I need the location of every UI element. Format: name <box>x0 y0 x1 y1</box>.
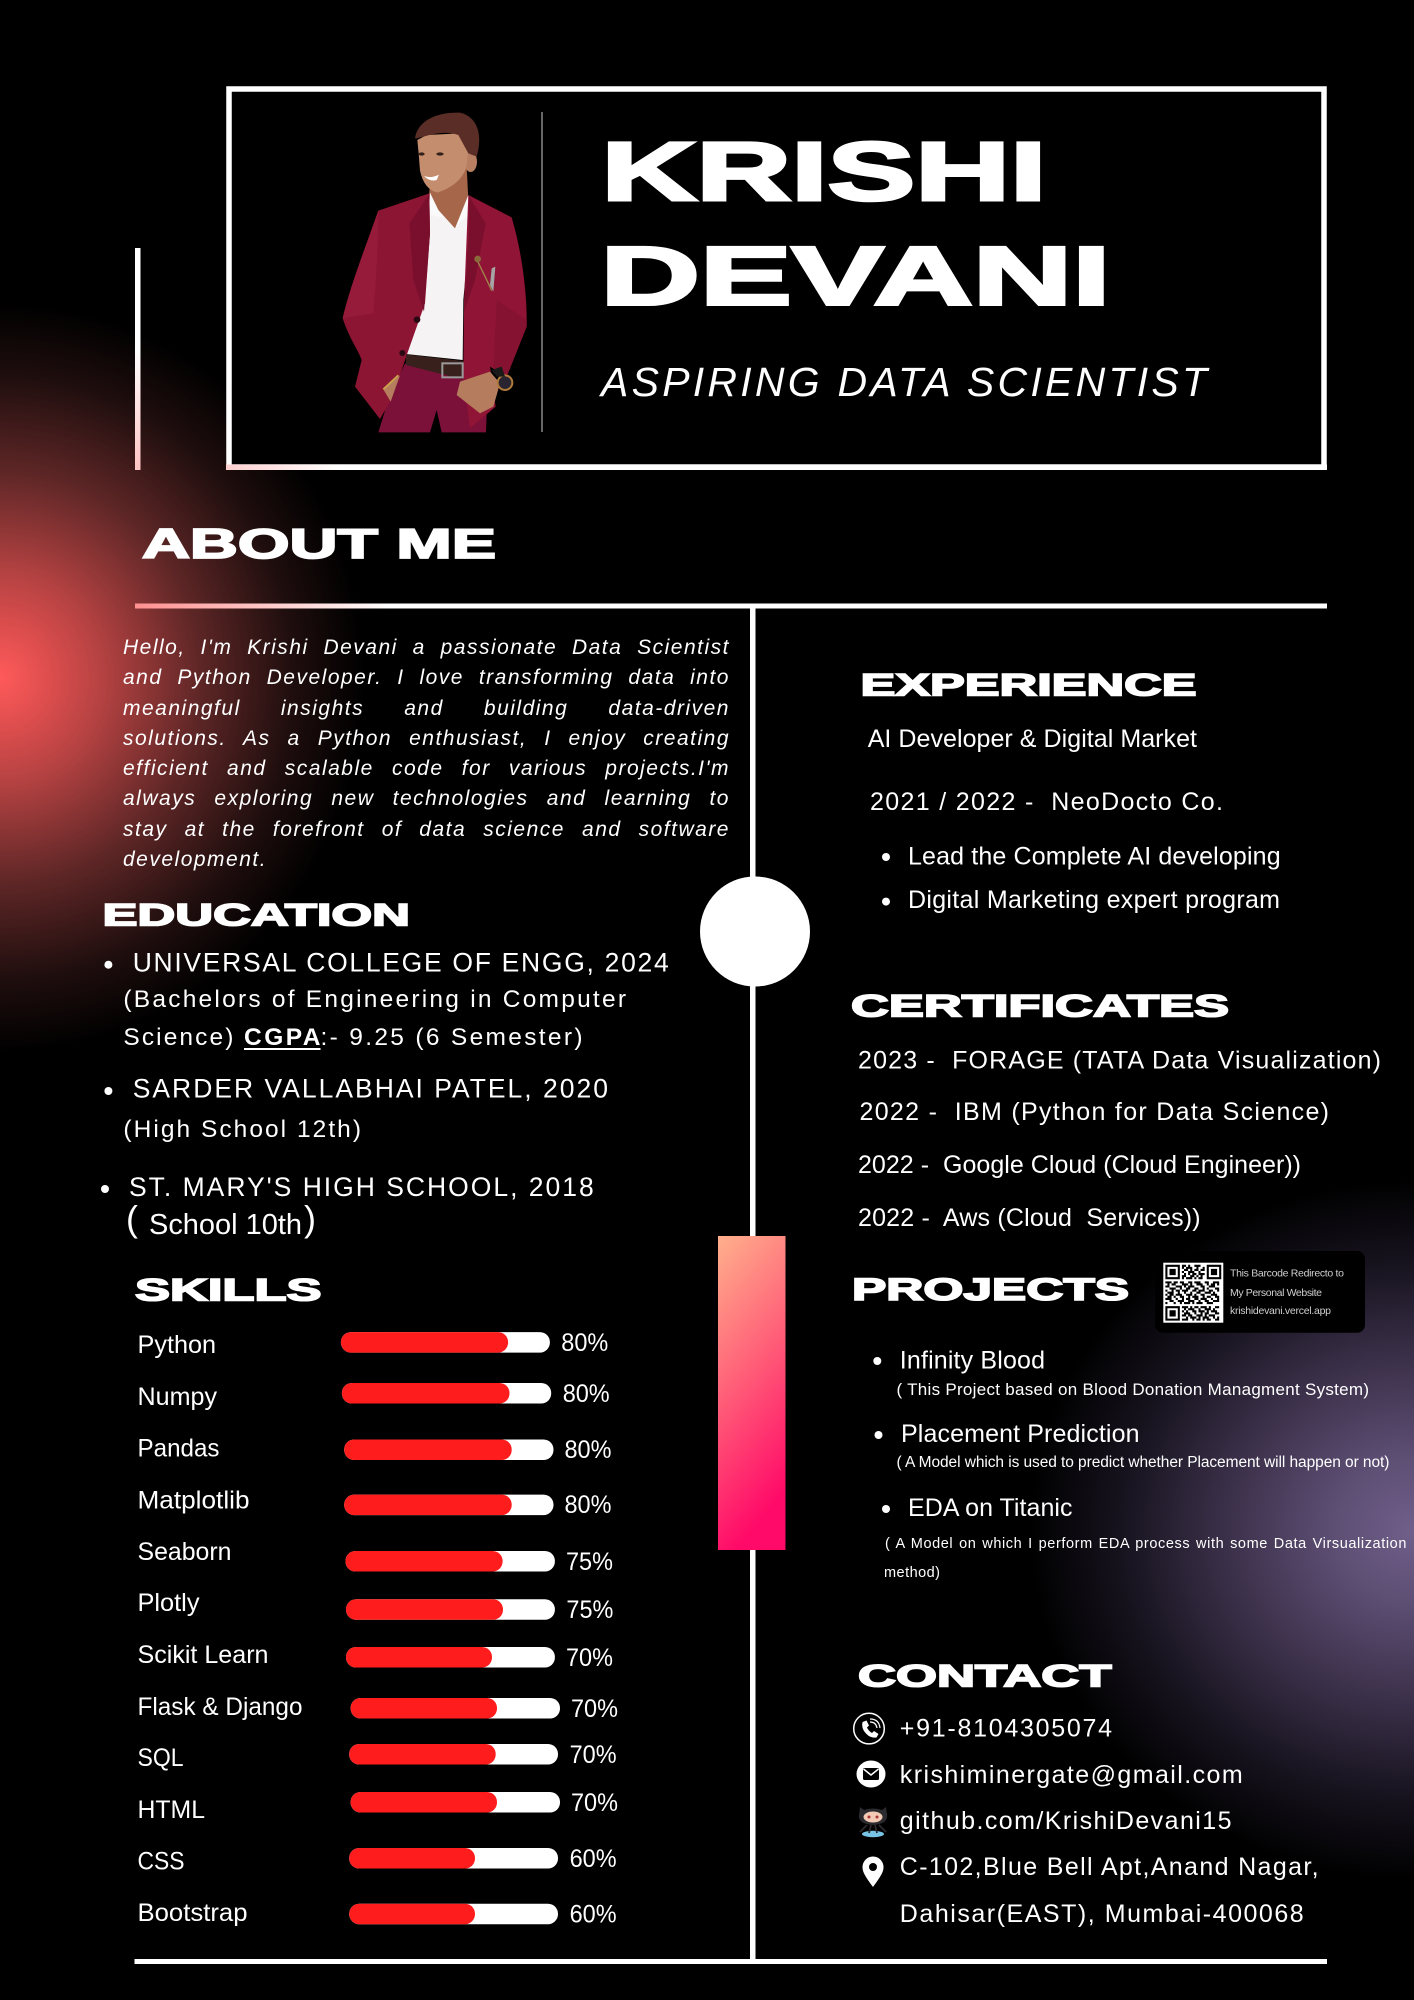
photo: portrait in maroon suit <box>343 113 527 432</box>
skill: scikit learn: 70% <box>566 1644 613 1672</box>
project 1: Infinity Blood <box>900 1346 1045 1374</box>
panel: education <box>101 896 669 1241</box>
qr code <box>1163 1263 1223 1323</box>
certificate 1: 2023 - FORAGE (TATA Data Visualization) <box>858 1047 1381 1075</box>
project 3: EDA on Titanic <box>908 1494 1072 1522</box>
email address: krishiminergate@gmail.com <box>900 1761 1243 1789</box>
skill: css <box>138 1845 617 1876</box>
subtitle: ASPIRING DATA SCIENTIST <box>598 359 1210 405</box>
icon: location pin <box>862 1856 884 1887</box>
heading: experience: EXPERIENCE <box>860 666 1196 702</box>
horizontal divider bottom <box>134 1959 1327 1964</box>
skill: bootstrap: Bootstrap <box>138 1899 248 1927</box>
certificate 4: 2022 - Aws (Cloud Services)) <box>858 1204 1201 1232</box>
project 1: ( This Project based on Blood Donation Managment System) <box>896 1380 1369 1399</box>
about me paragraph: and Python Developer. I love transforming data into <box>123 666 730 689</box>
skill: plotly: 75% <box>566 1596 613 1624</box>
skill: plotly <box>138 1589 613 1624</box>
skill: pandas <box>138 1434 612 1464</box>
postal address <box>900 1853 1319 1928</box>
icon: email <box>856 1760 886 1788</box>
education item 3: ST. MARY'S HIGH SCHOOL, 2018 <box>129 1172 594 1202</box>
education item 2: (High School 12th) <box>123 1116 361 1143</box>
skill: python: 80% <box>561 1329 608 1357</box>
heading: projects: PROJECTS <box>852 1271 1129 1307</box>
phone number: +91-8104305074 <box>900 1714 1112 1742</box>
skill: sql: 70% <box>570 1741 617 1769</box>
skill: css: CSS <box>138 1848 184 1876</box>
job title: AI Developer & Digital Market <box>868 725 1197 753</box>
about me paragraph: development. <box>123 848 267 871</box>
panel: certificates <box>851 988 1381 1232</box>
title: name <box>600 125 1110 322</box>
job bullet 1: Lead the Complete AI developing <box>908 842 1281 870</box>
panel: skills <box>135 1272 618 1928</box>
title: name: KRISHI <box>602 125 1046 218</box>
background glow: purple <box>1025 1176 1414 1886</box>
skill: flask and django: Flask & Django <box>138 1693 302 1721</box>
education item 3: ) <box>304 1198 316 1239</box>
skill: pandas: 80% <box>564 1436 612 1464</box>
timeline gradient block <box>718 1236 786 1550</box>
education item 2 <box>104 1073 608 1143</box>
skill: css: 60% <box>570 1845 617 1873</box>
about me paragraph: solutions. As a Python enthusiast, I enjoy creating <box>123 727 730 750</box>
about me paragraph: meaningful insights and building data-driven <box>123 697 730 720</box>
center timeline <box>750 608 756 1964</box>
skill: flask and django: 70% <box>571 1695 618 1723</box>
photo divider <box>541 112 543 432</box>
education item 1 <box>104 948 669 1051</box>
skill: matplotlib <box>138 1486 612 1519</box>
project 3: method) <box>884 1565 940 1581</box>
skill: numpy <box>138 1380 610 1411</box>
postal address: Dahisar(EAST), Mumbai-400068 <box>900 1900 1304 1928</box>
heading: about me: ABOUT ME <box>142 520 496 567</box>
timeline circle <box>700 876 810 986</box>
skill: html: 70% <box>571 1789 618 1817</box>
panel: projects <box>852 1251 1389 1581</box>
skill: seaborn: 75% <box>566 1548 613 1576</box>
skill: numpy: Numpy <box>138 1383 218 1411</box>
icon: github octocat <box>859 1807 887 1837</box>
heading: skills: SKILLS <box>135 1272 322 1308</box>
skill: matplotlib: 80% <box>564 1491 612 1519</box>
skill: sql <box>138 1741 617 1772</box>
skill: html <box>138 1789 618 1824</box>
heading: contact: CONTACT <box>858 1658 1112 1694</box>
skill: python <box>138 1329 608 1359</box>
skill: seaborn: Seaborn <box>138 1538 232 1566</box>
github address: github.com/KrishiDevani15 <box>900 1807 1232 1835</box>
skill: plotly: Plotly <box>138 1589 200 1617</box>
skill: pandas: Pandas <box>138 1434 220 1462</box>
qr caption: My Personal Website <box>1230 1287 1322 1299</box>
education item 1: CGPA <box>244 1024 321 1051</box>
about me paragraph: efficient and scalable code for various projects.I'm <box>123 757 730 780</box>
skill: python: Python <box>138 1331 216 1359</box>
about me paragraph <box>123 636 730 871</box>
education item 3: School 10th <box>149 1209 302 1241</box>
education item 3: ( <box>126 1198 138 1239</box>
about me paragraph: stay at the forefront of data science and software <box>123 818 730 841</box>
skill: bootstrap <box>138 1899 617 1928</box>
about me paragraph: Hello, I'm Krishi Devani a passionate Data Scientist <box>123 636 730 659</box>
skill: bootstrap: 60% <box>570 1900 617 1928</box>
education item 3 <box>101 1172 594 1241</box>
postal address: C-102,Blue Bell Apt,Anand Nagar, <box>900 1853 1319 1881</box>
icon: phone <box>854 1713 884 1744</box>
qr caption <box>1230 1268 1344 1317</box>
skill: scikit learn <box>138 1641 613 1672</box>
heading: education: EDUCATION <box>102 896 410 932</box>
accent bar: left vertical <box>135 248 140 470</box>
project 3 description: ( A Model on which I perform EDA process with some Data Virsualization <box>885 1536 1407 1552</box>
job dates and company: 2021 / 2022 - NeoDocto Co. <box>870 788 1223 816</box>
education item 1: Science) <box>123 1024 233 1051</box>
education item 2: SARDER VALLABHAI PATEL, 2020 <box>133 1073 608 1103</box>
horizontal divider top <box>135 604 1327 608</box>
skill: html: HTML <box>138 1796 205 1824</box>
title: name: DEVANI <box>600 230 1110 322</box>
project 2 <box>874 1420 1389 1471</box>
project 1 <box>873 1346 1369 1399</box>
project 2: ( A Model which is used to predict whether Placement will happen or not) <box>896 1454 1389 1471</box>
project 2: Placement Prediction <box>901 1420 1140 1448</box>
qr card <box>1155 1251 1365 1333</box>
skill: scikit learn: Scikit Learn <box>138 1641 268 1669</box>
panel: experience <box>860 666 1281 914</box>
skill: matplotlib: Matplotlib <box>138 1486 250 1514</box>
qr caption: krishidevani.vercel.app <box>1230 1305 1331 1317</box>
about me paragraph: always exploring new technologies and learning to <box>123 787 730 810</box>
job bullet 2: Digital Marketing expert program <box>908 886 1280 914</box>
project 3 <box>882 1494 1072 1581</box>
skill: seaborn <box>138 1538 613 1576</box>
education item 1: :- 9.25 (6 Semester) <box>320 1024 582 1051</box>
heading: certificates: CERTIFICATES <box>851 988 1229 1024</box>
education item 1: UNIVERSAL COLLEGE OF ENGG, 2024 <box>133 948 669 978</box>
certificate 2: 2022 - IBM (Python for Data Science) <box>860 1098 1329 1126</box>
skill: flask and django <box>138 1693 618 1723</box>
certificate 3: 2022 - Google Cloud (Cloud Engineer)) <box>858 1151 1301 1179</box>
skill: sql: SQL <box>138 1744 184 1772</box>
panel: contact <box>854 1658 1319 1928</box>
qr caption: This Barcode Redirecto to <box>1230 1268 1344 1280</box>
header frame <box>226 89 1327 470</box>
background glow: red <box>0 300 370 1060</box>
skill: numpy: 80% <box>563 1380 610 1408</box>
education item 1: (Bachelors of Engineering in Computer <box>123 986 626 1013</box>
